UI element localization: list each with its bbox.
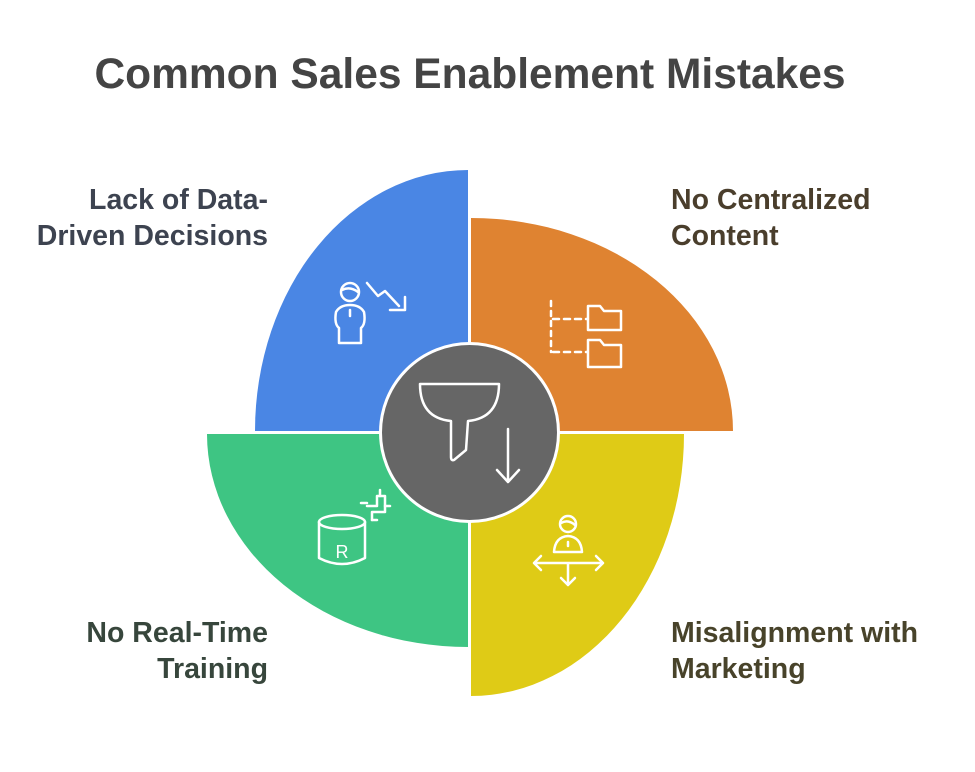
label: lack of data: Lack of Data- [89,184,268,216]
panel: orange quadrant [471,218,733,431]
label: lack of data: Driven Decisions [37,220,268,252]
panel: green quadrant [207,434,468,647]
label: lack of data [37,184,268,252]
label: misalignment: Marketing [671,653,806,685]
panel: green quadrant: R [336,542,348,562]
label: misalignment: Misalignment with [671,617,918,649]
panel: yellow quadrant [471,434,684,696]
label: no real-time training: Training [157,653,268,685]
label: no centralized content [671,184,871,252]
label: misalignment [671,617,918,685]
icon: database with chip [319,490,390,564]
panel: blue quadrant [255,170,468,431]
icon: person with down trend [335,283,405,343]
label: no centralized content: No Centralized [671,184,871,216]
title: Common Sales Enablement Mistakes [94,51,846,98]
label: no real-time training [86,617,268,685]
icon: person with arrows [534,516,603,585]
label: no real-time training: No Real-Time [86,617,268,649]
icon: folder tree [551,301,621,367]
center circle with funnel [380,344,558,522]
label: no centralized content: Content [671,220,779,252]
